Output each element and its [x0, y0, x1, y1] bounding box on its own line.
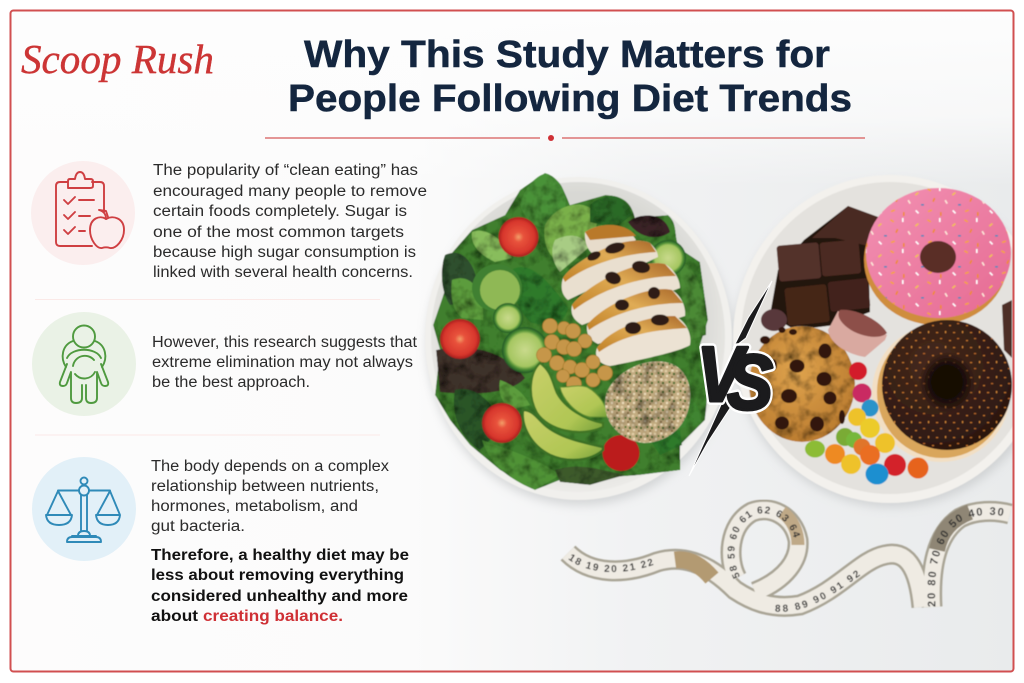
- measuring tape: 20 80 70 60 50 40 30: [926, 506, 1004, 608]
- photo: salad bowl versus sweets: [424, 172, 1012, 618]
- conclusion text: creating balance.: [203, 608, 343, 625]
- measuring tape: 58 59 60 61 62 63 64: [727, 506, 800, 580]
- VS badge with lightning bolt: S: [727, 338, 773, 426]
- conclusion text: [151, 547, 409, 625]
- conclusion text: Therefore, a healthy diet may be: [151, 547, 409, 564]
- peanut butter cup: [828, 310, 887, 357]
- cucumbers: [472, 240, 686, 373]
- avocado: [523, 363, 607, 460]
- text block: [151, 458, 389, 535]
- plate shadows: [424, 274, 1012, 510]
- conclusion text: about: [151, 608, 198, 625]
- text block: extreme elimination may not always: [152, 354, 413, 371]
- title: [288, 34, 852, 120]
- text block: gut bacteria.: [151, 518, 245, 535]
- conclusion text: less about removing everything: [151, 567, 404, 584]
- title: Why This Study Matters for: [304, 34, 830, 76]
- VS badge with lightning bolt: S: [727, 338, 773, 426]
- text block: linked with several health concerns.: [153, 264, 413, 281]
- text block: encouraged many people to remove: [153, 183, 427, 200]
- measuring tape: 88 89 90 91 92: [774, 570, 860, 612]
- pink donut: [864, 188, 1011, 325]
- icon: body with cycle arrows: [32, 312, 136, 416]
- chickpeas: [536, 318, 612, 392]
- salad bowl: [425, 173, 732, 500]
- section: balance: [32, 457, 409, 625]
- tomatoes: [440, 217, 640, 471]
- conclusion text: considered unhealthy and more: [151, 588, 408, 605]
- title divider: [265, 135, 865, 141]
- text block: relationship between nutrients,: [151, 478, 379, 495]
- text block: [152, 334, 418, 391]
- text block: The body depends on a complex: [151, 458, 389, 475]
- VS badge with lightning bolt: [689, 281, 773, 476]
- section: clean eating: [31, 161, 427, 281]
- icon: balance scale: [32, 457, 136, 561]
- text block: hormones, metabolism, and: [151, 498, 358, 515]
- text block: [153, 162, 427, 281]
- candies: [805, 362, 928, 484]
- section: extreme elimination: [32, 312, 418, 416]
- chicken slices: [562, 225, 690, 366]
- greens: [433, 173, 712, 490]
- title: People Following Diet Trends: [288, 78, 852, 120]
- chocolate donut: [872, 320, 1012, 462]
- text block: because high sugar consumption is: [153, 244, 416, 261]
- dessert plate: [733, 175, 1024, 503]
- measuring tape: [560, 500, 1012, 618]
- chocolate at plate edge: [1002, 300, 1012, 358]
- text block: one of the most common targets: [153, 224, 404, 241]
- logo: Scoop Rush: Scoop Rush: [21, 36, 214, 82]
- text block: certain foods completely. Sugar is: [153, 203, 407, 220]
- chocolate chip muffin: [749, 326, 855, 442]
- measuring tape: 18 19 20 21 22: [568, 554, 654, 573]
- chocolate pieces: [761, 206, 878, 331]
- chocolate chips: [760, 327, 845, 432]
- text block: However, this research suggests that: [152, 334, 418, 351]
- text block: be the best approach.: [152, 374, 310, 391]
- quinoa: [605, 361, 690, 443]
- VS badge with lightning bolt: V: [697, 330, 748, 418]
- text block: The popularity of “clean eating” has: [153, 162, 418, 179]
- VS badge with lightning bolt: V: [697, 330, 748, 418]
- icon: clipboard with apple: [31, 161, 135, 265]
